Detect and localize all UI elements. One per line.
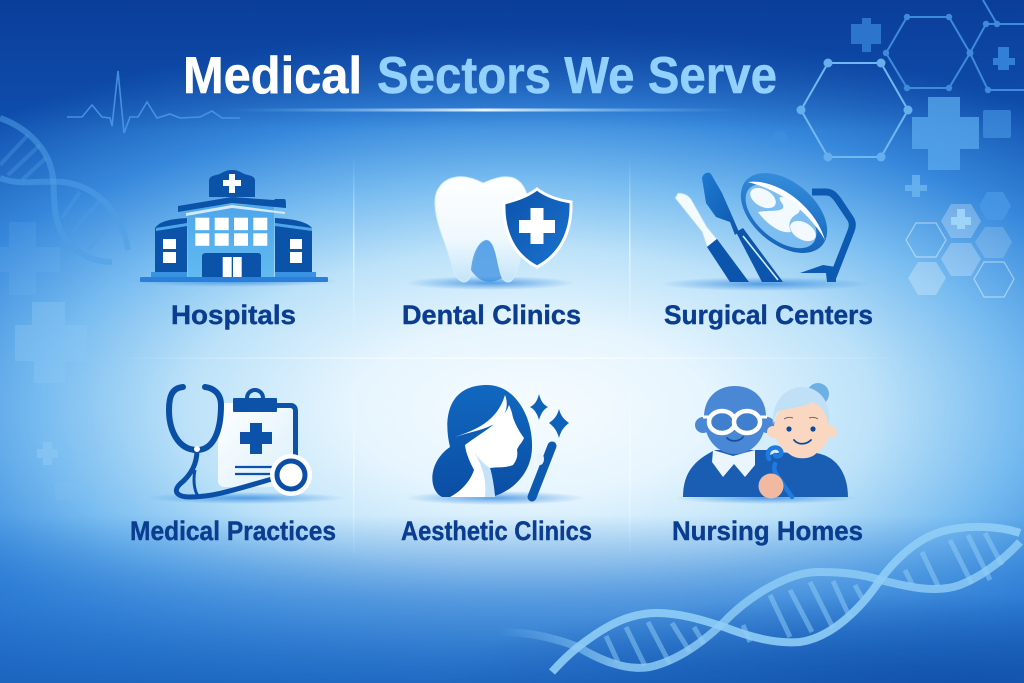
decoration: DNA helix, bottom right xyxy=(500,527,1020,672)
label: hospitals: Hospitals xyxy=(171,300,296,330)
decoration: DNA helix, left xyxy=(0,118,128,262)
title xyxy=(183,47,777,112)
decoration: honeycomb cells, right xyxy=(906,192,1014,297)
label: surgical centers: Surgical Centers xyxy=(664,300,873,330)
icon: stethoscope and clipboard xyxy=(145,387,345,504)
elderly woman xyxy=(767,383,848,497)
sparkles xyxy=(530,394,548,420)
icon: tooth with shield xyxy=(405,177,575,290)
panel: nursing homes xyxy=(672,383,863,546)
elderly man xyxy=(683,386,775,497)
panel: hospitals xyxy=(129,170,339,330)
surgical lamp xyxy=(726,157,852,282)
panel: medical practices xyxy=(130,387,345,546)
hair xyxy=(432,385,532,497)
cane and hand xyxy=(758,448,792,498)
hair highlight xyxy=(455,395,507,437)
decoration: ECG line xyxy=(67,71,240,133)
stethoscope xyxy=(169,387,312,497)
title: light blue words: Sectors We Serve xyxy=(377,47,777,105)
face and neck xyxy=(450,405,524,497)
icon: hospital building xyxy=(129,170,339,287)
scalpel one xyxy=(675,193,749,282)
wand xyxy=(532,446,552,497)
icon: elderly couple xyxy=(674,383,858,504)
label: aesthetic clinics: Aesthetic Clinics xyxy=(401,516,592,546)
decoration: faint crosses, left xyxy=(0,222,105,500)
title: white word: Medical xyxy=(183,47,362,105)
label: dental clinics: Dental Clinics xyxy=(402,300,581,330)
clipboard xyxy=(218,390,298,487)
icon: scalpels and surgical lamp xyxy=(660,157,870,291)
panel: aesthetic clinics xyxy=(401,385,592,546)
scalpel two xyxy=(702,173,783,282)
decoration: hexagon network and crosses, top right xyxy=(772,0,1024,197)
label: nursing homes: Nursing Homes xyxy=(672,516,863,546)
title underline xyxy=(225,108,745,112)
dividers xyxy=(110,155,910,560)
icon: woman profile with sparkles xyxy=(405,385,585,505)
panel: surgical centers xyxy=(660,157,873,330)
label: medical practices: Medical Practices xyxy=(130,516,336,546)
panel: dental clinics xyxy=(402,177,581,330)
